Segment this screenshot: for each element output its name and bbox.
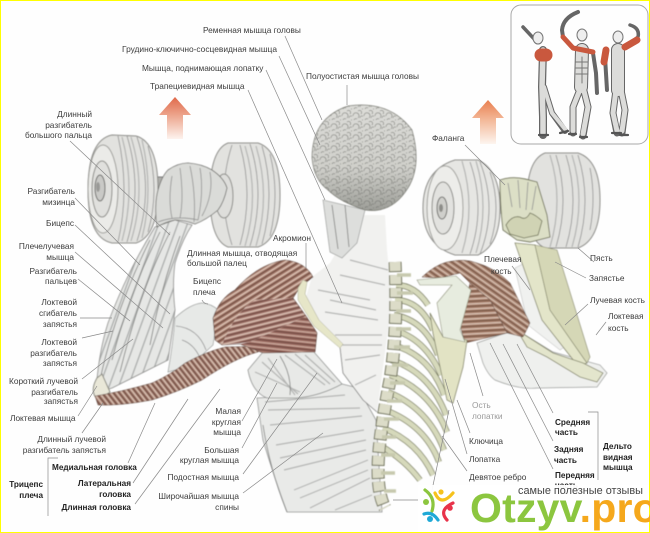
back: infraspinatus <box>248 351 342 398</box>
label: latissimus dorsi: спины <box>215 502 239 512</box>
left deltoid muscle <box>213 260 317 353</box>
label: extensor carpi radialis longus: разгибатель запястья <box>23 445 106 455</box>
right dumbbell <box>423 153 600 255</box>
acromion tendon <box>298 280 343 348</box>
label: extensor carpi ulnaris: разгибатель <box>30 348 77 358</box>
label: flexor carpi ulnaris: сгибатель <box>39 308 77 318</box>
arrow up left <box>159 97 191 139</box>
anatomical drawing <box>88 105 607 512</box>
label: extensor pollicis longus: разгибатель <box>45 120 92 130</box>
label: scapular spine: Ость <box>472 400 491 410</box>
right forearm bones <box>515 243 590 366</box>
label: deltoid: Дельто <box>603 442 632 451</box>
label: extensor digiti minimi: мизинца <box>42 197 75 207</box>
label: teres minor: мышца <box>213 427 241 437</box>
label: rear part: часть <box>554 456 577 465</box>
label: lateral head: Латеральная <box>78 479 131 488</box>
leader lines <box>48 36 606 516</box>
left forearm and hand <box>93 163 227 400</box>
label: triceps: Трицепс <box>9 480 43 489</box>
label: triceps: плеча <box>19 491 43 500</box>
label: extensor carpi ulnaris: запястья <box>43 358 77 368</box>
label: flexor carpi ulnaris: запястья <box>43 319 77 329</box>
label: lateral head: головка <box>99 490 131 499</box>
right biceps area <box>515 258 575 350</box>
label: semispinalis: Полуостистая мышца головы <box>306 71 419 81</box>
label: acromion: Акромион <box>273 233 311 243</box>
arrow up right <box>472 100 504 144</box>
watermark: white backing <box>418 485 649 532</box>
label: biceps: Бицепс <box>46 218 74 228</box>
label: rear part: Задняя <box>554 445 584 454</box>
label: phalanx: Фаланга <box>432 133 465 143</box>
label: anconeus: Локтевая мышца <box>10 413 76 423</box>
icon: otzyv logo <box>423 489 453 522</box>
label: extensor digiti minimi: Разгибатель <box>28 186 75 196</box>
back: latissimus <box>257 384 382 512</box>
label: extensor carpi radialis brevis: разгибатель <box>31 387 78 397</box>
label: extensor digitorum: пальцев <box>45 276 78 286</box>
clavicle and acromion <box>417 276 471 342</box>
label: infraspinatus: Подостная мышца <box>168 472 239 482</box>
figure right <box>604 25 638 135</box>
label: extensor pollicis longus: большого пальца <box>25 130 92 140</box>
label: deltoid: видная <box>603 453 633 462</box>
label: biceps brachii: Бицепс <box>193 276 221 286</box>
label: extensor carpi ulnaris: Локтевой <box>41 337 77 347</box>
scapula bone <box>430 313 467 403</box>
label: metacarpus: Пясть <box>590 253 613 263</box>
label: extensor carpi radialis brevis: Короткий лучевой <box>9 376 78 386</box>
label: brachioradialis: мышца <box>46 252 74 262</box>
label: extensor carpi radialis brevis: запястья <box>44 396 78 406</box>
label: levator scapulae: Мышца, поднимающая лопатку <box>142 63 264 73</box>
triceps muscle <box>95 346 265 405</box>
right upper arm soft tissue <box>477 330 607 388</box>
label: humerus: кость <box>491 266 512 276</box>
label: middle part: часть <box>555 428 578 437</box>
label: trapezius: Трапециевидная мышца <box>150 81 245 91</box>
label: latissimus dorsi: Широчайшая мышца <box>158 491 239 501</box>
label: ulna: Локтевая <box>608 311 644 321</box>
inset: exercise figures <box>511 5 648 144</box>
label: biceps brachii: плеча <box>193 287 216 297</box>
back torso <box>248 200 392 512</box>
left upper arm biceps <box>168 303 218 372</box>
label: teres major: круглая мышца <box>180 455 239 465</box>
label: flexor carpi ulnaris: Локтевой <box>41 297 77 307</box>
label: ninth rib: Девятое ребро <box>469 472 527 482</box>
figure left <box>523 27 568 135</box>
figure centre <box>562 12 597 137</box>
label: abductor pollicis longus: большой палец <box>187 258 247 268</box>
label: front part: часть <box>555 481 578 490</box>
label: teres minor: круглая <box>212 417 241 427</box>
label: extensor pollicis longus: Длинный <box>57 109 92 119</box>
right upper arm bone <box>517 330 603 382</box>
head hair <box>312 105 416 211</box>
left dumbbell <box>88 135 280 247</box>
label: teres major: Большая <box>204 445 239 455</box>
back: trapezius <box>305 215 392 412</box>
label: clavicle: Ключица <box>469 436 503 446</box>
label: long head: Длинная головка <box>62 503 131 512</box>
label: humerus: Плечевая <box>484 254 522 264</box>
label: radius: Лучевая кость <box>590 295 645 305</box>
watermark <box>418 485 650 532</box>
label: wrist: Запястье <box>589 273 625 283</box>
label: middle part: Средняя <box>555 418 590 427</box>
label: ulna: кость <box>608 323 629 333</box>
right hand bones <box>500 178 550 242</box>
label: extensor digitorum: Разгибатель <box>30 266 77 276</box>
label: medial head: Медиальная головка <box>52 463 137 472</box>
label: abductor pollicis longus: Длинная мышца, отводящая <box>187 248 297 258</box>
back: neck muscles <box>323 200 365 258</box>
label: extensor carpi radialis longus: Длинный лучевой <box>37 434 106 444</box>
label: splenius: Ременная мышца головы <box>203 25 301 35</box>
label: teres minor: Малая <box>215 406 241 416</box>
label: front part: Передняя <box>555 471 595 480</box>
label: sternocleidomastoid: Грудино-ключично-сосцевидная мышца <box>122 44 277 54</box>
label: deltoid: мышца <box>603 463 633 472</box>
label: scapular spine: лопатки <box>472 411 503 421</box>
label: scapula: Лопатка <box>469 454 501 464</box>
spine and ribs <box>378 262 447 508</box>
label: brachioradialis: Плечелучевая <box>19 241 74 251</box>
right deltoid muscle <box>422 260 530 343</box>
watermark: tagline: самые полезные отзывы <box>518 485 643 497</box>
